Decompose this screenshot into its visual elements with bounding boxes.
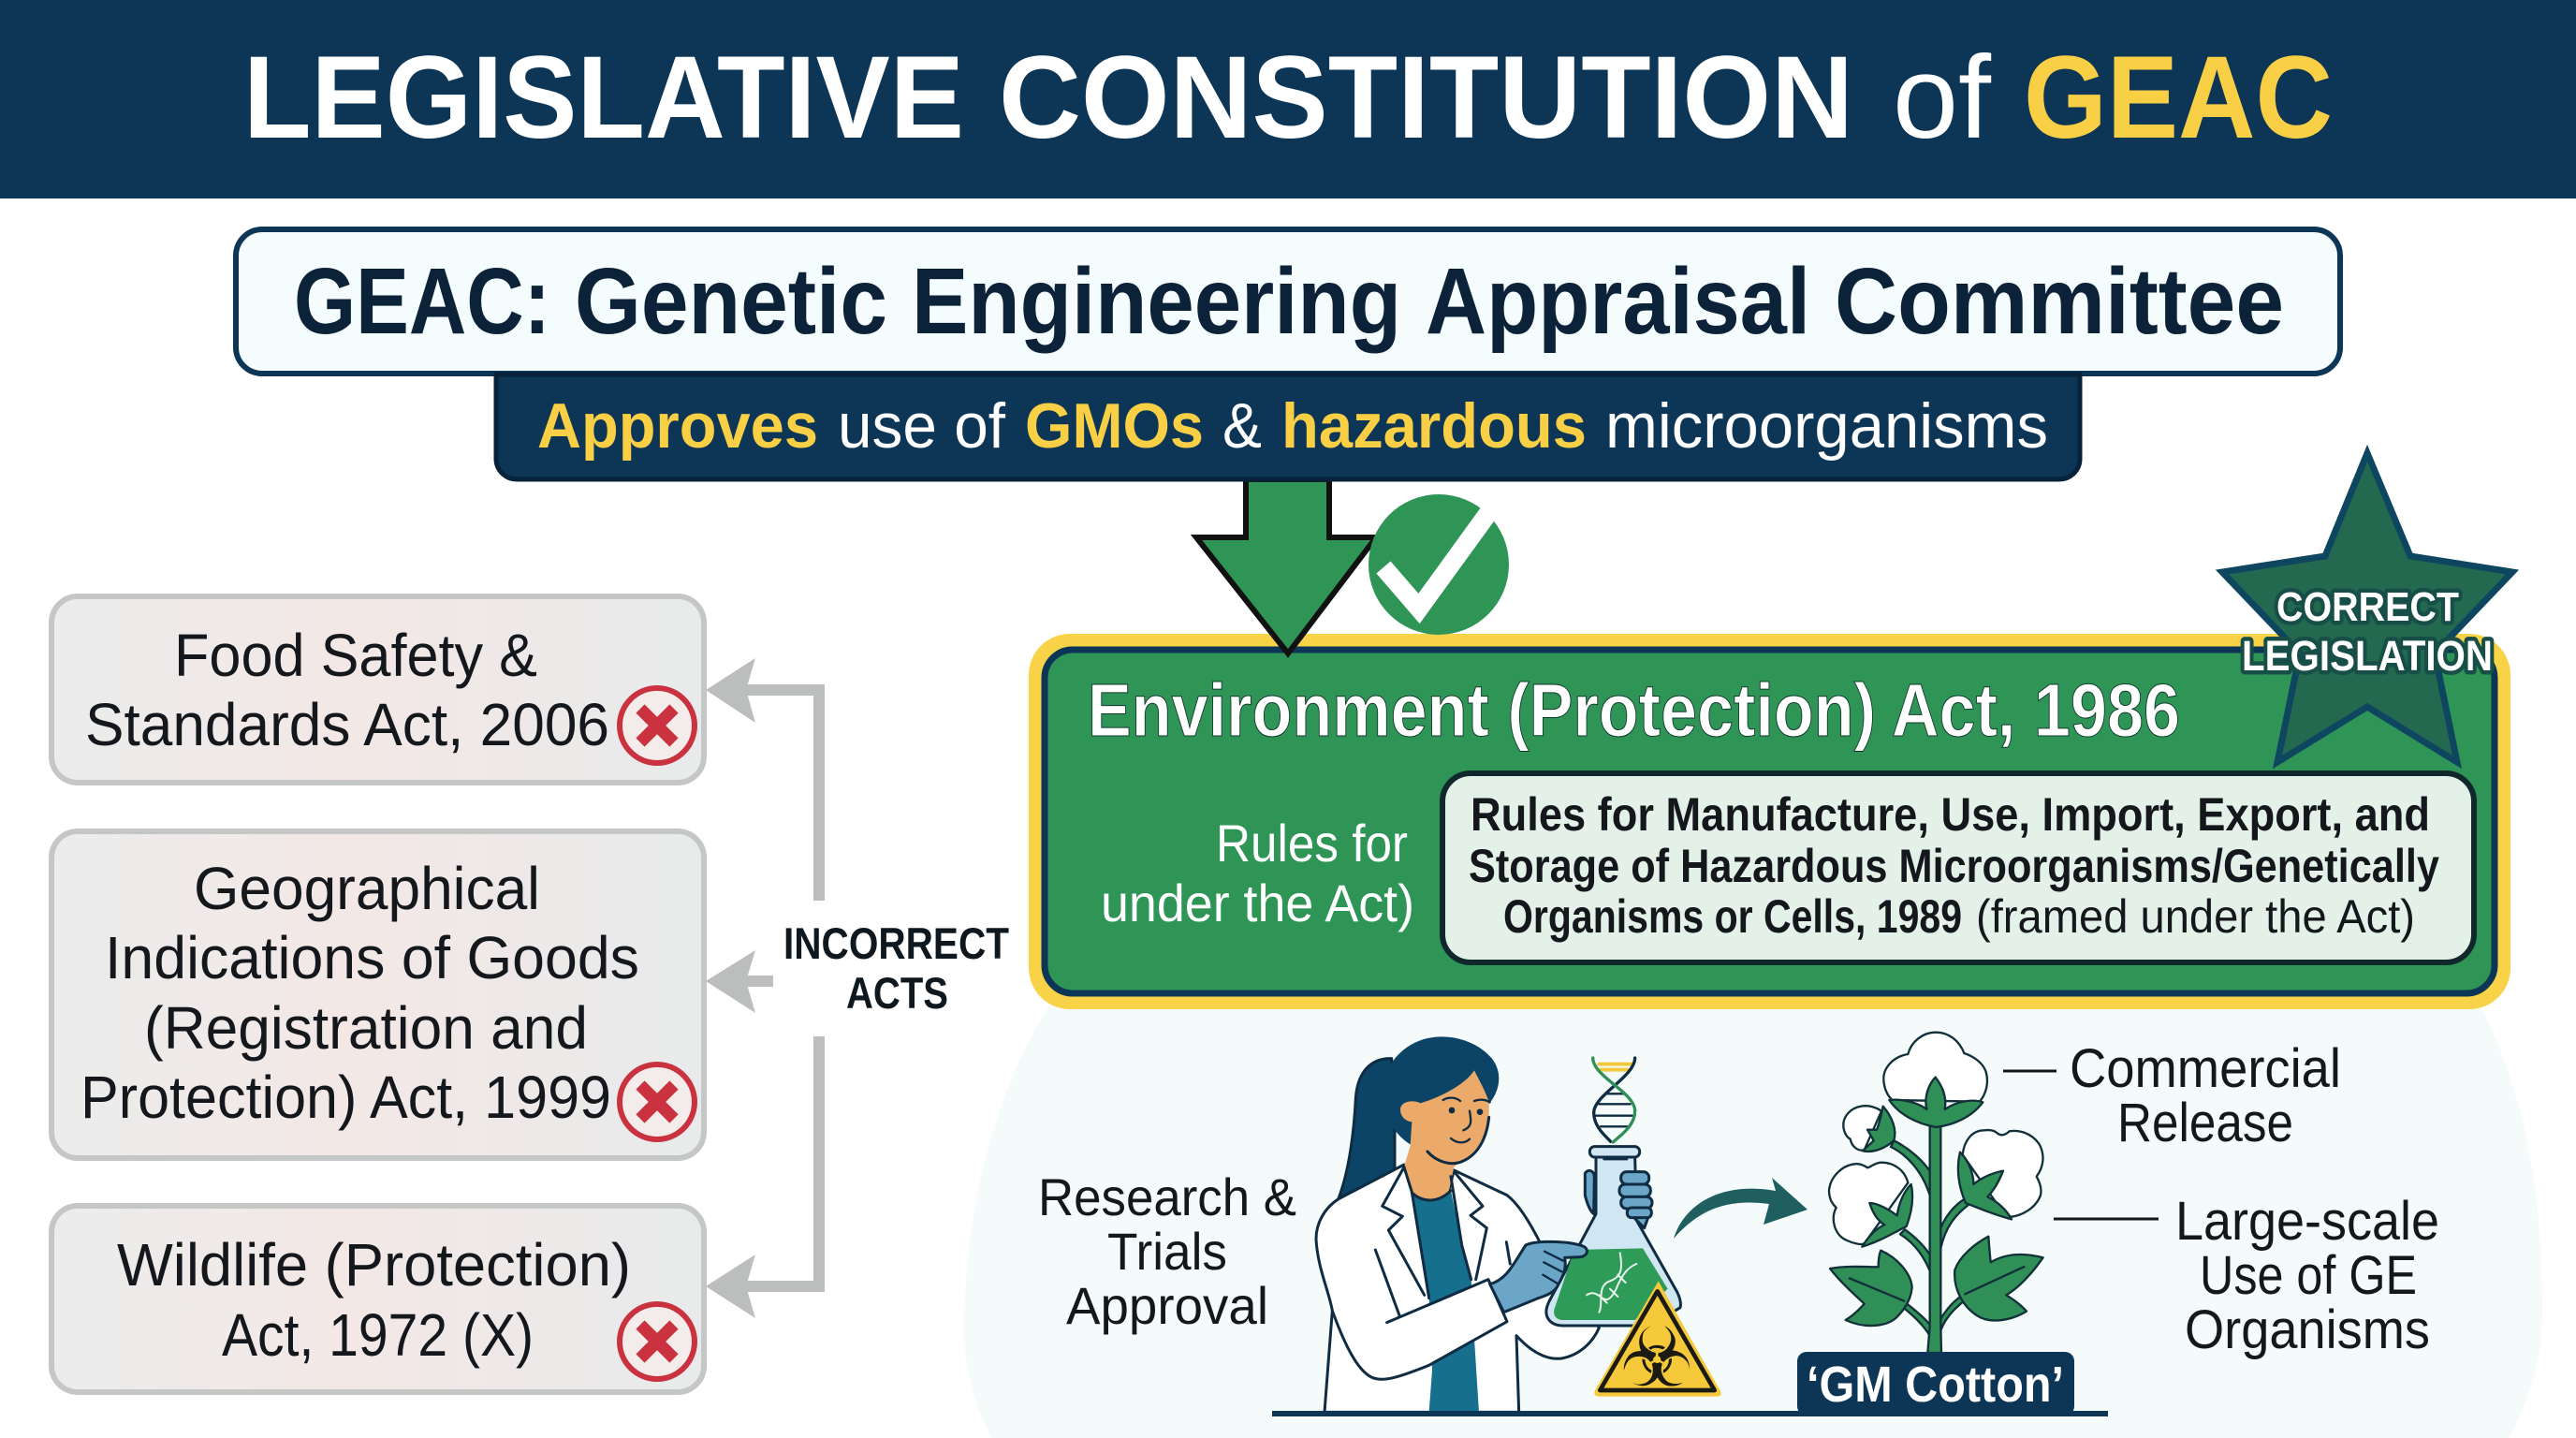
arrow: top incorrect act: [706, 658, 819, 901]
description text: use of: [838, 390, 1005, 462]
rules text: Rules for Manufacture, Use, Import, Export, and: [1471, 788, 2430, 841]
glove behind flask: [1585, 1170, 1594, 1214]
icon: red cross 1: [620, 688, 695, 763]
top cotton boll: [1883, 1033, 1987, 1102]
act name: Environment (Protection) Act, 1986: [1088, 668, 2180, 752]
illustration: scientist with flask: [1316, 1036, 1680, 1412]
description text: GMOs: [1025, 390, 1204, 462]
panel: correct act: [1029, 634, 2510, 1009]
panel: Wildlife act: [51, 1206, 704, 1392]
act text: [80, 855, 639, 1131]
arrow: middle incorrect act: [706, 950, 773, 1013]
label: incorrect acts: [783, 918, 1009, 1018]
act text: Act, 1972 (X): [222, 1301, 534, 1369]
act text: Standards Act, 2006: [85, 691, 609, 758]
subtitle text: GEAC:: [294, 249, 550, 354]
scientist hair: [1383, 1036, 1499, 1145]
header band: [0, 0, 2576, 198]
label: research and trials approval: Research &: [1038, 1167, 1296, 1226]
scientist coat: [1316, 1165, 1599, 1412]
description text: Approves: [537, 390, 818, 462]
panel: rules 1989: [1442, 773, 2474, 962]
label: large-scale use: [2054, 1191, 2439, 1360]
right cotton boll: [1963, 1130, 2042, 1217]
label: large-scale use: Organisms: [2185, 1299, 2430, 1360]
description text: hazardous: [1281, 390, 1587, 462]
panel: Food Safety act: [51, 596, 704, 783]
subtitle text: Engineering: [912, 249, 1401, 354]
arrow: to GM cotton: [1674, 1178, 1808, 1239]
badge text: CORRECT: [2276, 584, 2459, 630]
description text: microorganisms: [1605, 390, 2048, 462]
description banner: [496, 374, 2080, 479]
scientist facial features: [1412, 1098, 1490, 1200]
icon: red cross 3: [620, 1304, 695, 1379]
flask: [1546, 1147, 1680, 1326]
rules text: [1469, 788, 2439, 943]
coat lapels and folds: [1375, 1167, 1510, 1315]
rules text: Organisms or Cells, 1989: [1503, 890, 1962, 943]
icon: green check: [1368, 494, 1509, 635]
arrow: down to the correct act: [1196, 479, 1376, 653]
label: GM Cotton: ‘GM Cotton’: [1807, 1357, 2064, 1413]
act text: [117, 1231, 631, 1369]
subtitle box: [236, 229, 2340, 374]
act text: Food Safety &: [174, 622, 537, 689]
label: research and trials approval: Approval: [1066, 1276, 1268, 1335]
label: large-scale use: Large-scale: [2175, 1191, 2439, 1252]
title: CONSTITUTION: [999, 33, 1853, 163]
scientist ponytail: [1339, 1059, 1395, 1198]
scientist face and neck: [1400, 1070, 1489, 1201]
panel: illustration backdrop: [964, 1007, 2542, 1438]
label: large-scale use: Use of GE: [2200, 1245, 2417, 1306]
act text: Protection) Act, 1999: [80, 1064, 611, 1131]
icon: biohazard sign: ☣: [1620, 1309, 1693, 1405]
label: incorrect acts: ACTS: [846, 968, 948, 1018]
rules text: Storage of Hazardous Microorganisms/Genetically: [1469, 840, 2439, 892]
illustration: cotton plant: [1829, 1033, 2043, 1353]
label: commercial release: Release: [2117, 1093, 2293, 1153]
badge text: LEGISLATION: [2242, 632, 2493, 680]
subtitle text: Committee: [1835, 249, 2284, 354]
plant stems and leaves: [1830, 1078, 2043, 1353]
rules text: (framed under the Act): [1976, 890, 2415, 943]
subtitle text: Appraisal: [1426, 249, 1810, 354]
glove on flask neck: [1619, 1172, 1652, 1228]
rules label: under the Act): [1101, 873, 1414, 932]
icon: biohazard sign: [1594, 1281, 1721, 1405]
panel: Geographical Indications act: [51, 831, 704, 1158]
act text: (Registration and: [144, 994, 588, 1062]
glove pointing hand: [1490, 1241, 1587, 1313]
act text: Wildlife (Protection): [117, 1231, 631, 1299]
title: of: [1893, 33, 1991, 163]
act text: [85, 622, 609, 758]
description text: &: [1222, 390, 1262, 462]
icon: red cross 2: [620, 1064, 695, 1139]
large left cotton boll: [1829, 1163, 1908, 1244]
rules label: [1101, 814, 1414, 932]
subtitle text: Genetic: [575, 249, 887, 354]
title: GEAC: [2024, 33, 2333, 163]
rules label: Rules for: [1216, 814, 1408, 873]
ground line: [1272, 1411, 2108, 1416]
title: LEGISLATIVE: [243, 33, 964, 163]
label: commercial release: [2003, 1038, 2341, 1153]
act text: Indications of Goods: [105, 924, 639, 991]
scientist shirt: [1412, 1191, 1479, 1412]
coat sleeve: [1332, 1280, 1507, 1379]
label: commercial release: Commercial: [2070, 1038, 2341, 1099]
badge text: [2242, 584, 2493, 680]
label: research and trials approval: Trials: [1107, 1222, 1227, 1281]
label: research and trials approval: [1038, 1167, 1296, 1335]
badge: correct legislation: [2222, 453, 2512, 762]
act text: Geographical: [194, 855, 540, 922]
DNA helix: [1593, 1058, 1635, 1142]
arrow: bottom incorrect act: [706, 1036, 819, 1318]
label: incorrect acts: INCORRECT: [783, 918, 1009, 968]
small left cotton boll: [1843, 1106, 1881, 1151]
